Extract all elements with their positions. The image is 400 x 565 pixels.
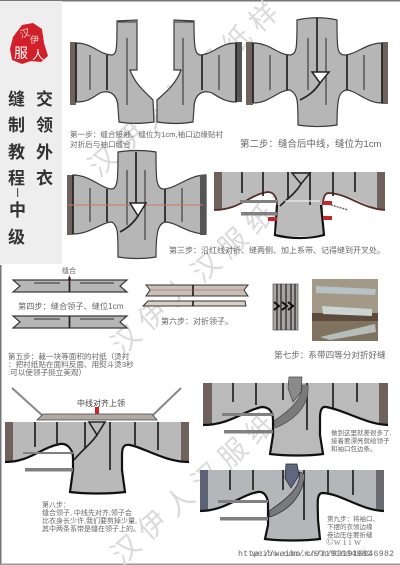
step 9 caption [327,514,379,539]
step 1 garment: left piece [70,20,154,124]
step 1 garment: right piece [157,20,242,124]
title: 交领外衣: 外 [36,143,53,162]
icon: red brand seal [10,23,48,64]
step 5 caption: ：把衬纸贴在面料反面、用熨斗烫3秒 [8,359,134,369]
title: 交领外衣: 衣 [36,168,53,188]
step 8 caption: 比衣身长少许,我们要剪掉少量, [42,516,137,525]
step 9 note [331,428,392,453]
step 9 garment: lower [200,464,384,540]
step 1 caption: 对折后与袖口缝合 [70,139,131,149]
title: 缝制教程—中级: 中 [9,201,26,220]
step 8 collar-alignment label [77,398,125,420]
step 9 caption: 第九步：将袖口、 [327,514,379,523]
step 8 caption: 其中两条系带是缝在领子上的。 [42,524,140,533]
title: 缝制教程—中级: 级 [8,227,25,247]
seam label and arrow [62,266,76,282]
step 2 garment [246,18,388,126]
watermark url: weibo.com/n/93191604982 [252,549,372,559]
step 5 caption: 第五步：裁一块等面积的衬纸（烫衬 [8,351,130,361]
icon: red brand seal: 服 [14,45,28,61]
watermark: 汉伊人汉服纸样: 汉伊人汉服纸样 [105,379,313,565]
step 9 garment: upper [203,377,388,456]
step 9 note: 接着要漂亮就给领子 [331,436,390,445]
title: 缝制教程—中级: 教 [8,143,25,162]
step 3 garment [67,150,206,258]
step 8 caption [42,500,140,533]
step 7 caption: 第七步：系带四等分对折好缝 [274,349,386,360]
step 9 note: 和袖口包边条。 [331,444,376,453]
step 3 caption: 第三步：沿红线对折、缝两侧、加上系带、记得缝到开叉处。 [169,245,385,255]
step 3 folded garment [214,172,385,238]
step 1 caption: 第一步：缝合接袖、缝位为1cm,袖口边缘贴衬 [70,129,224,139]
icon: red brand seal: 伊 [30,34,39,45]
seam label and arrow: 缝合 [62,266,76,275]
icon: red brand seal: 人 [32,48,44,62]
step 5 caption [8,351,134,377]
step 8 caption: 第八步： [42,500,70,509]
step 6 caption: 第六步：对折领子。 [161,316,233,326]
title: 缝制教程—中级 [8,90,26,247]
step 8 garment [5,388,189,494]
step 1 caption [70,129,224,149]
step 7 tie bands [273,284,298,330]
step 9 caption: 下摆的衣领边缘 [327,522,373,531]
step 9 caption: 卷边压住要折缝 [327,530,373,539]
step 2 caption: 第二步：缝合后中线，缝位为1cm [240,138,382,150]
watermark: 汉伊人汉服纸样: 汉伊人汉服纸样 [105,169,313,360]
title: 交领外衣 [36,89,53,188]
watermark url [238,537,394,559]
step 8 collar-alignment label: 中线对齐上领 [77,398,125,408]
step 4 collar strips: bottom [13,316,127,328]
watermark: 汉伊人汉服纸样 [82,0,313,565]
sidebar panel [0,1,62,264]
watermark url: ©w i i w [326,537,362,548]
title: 缝制教程—中级: 程 [8,169,25,188]
title: 交领外衣: 交 [36,89,53,109]
step 7 photo [312,279,378,341]
step 5 caption: :可以使领子挺立美观） [8,367,86,377]
step 6 collar strips [143,285,248,306]
title: 交领外衣: 领 [36,116,53,135]
watermark url: http://weibo.cn/n/931916046982 [238,549,394,559]
icon: red brand seal: 汉 [19,27,31,41]
step 8 caption: 缝合领子, 中线先对齐,领子会 [42,508,132,517]
step 9 note: 做到这里就差很多了, [331,428,392,437]
step 4 caption: 第四步：缝合领子、缝位1cm [18,301,124,311]
step 4 collar strips: top [13,277,127,292]
title: 缝制教程—中级: 缝 [8,90,25,109]
title: 缝制教程—中级: 制 [8,116,25,135]
